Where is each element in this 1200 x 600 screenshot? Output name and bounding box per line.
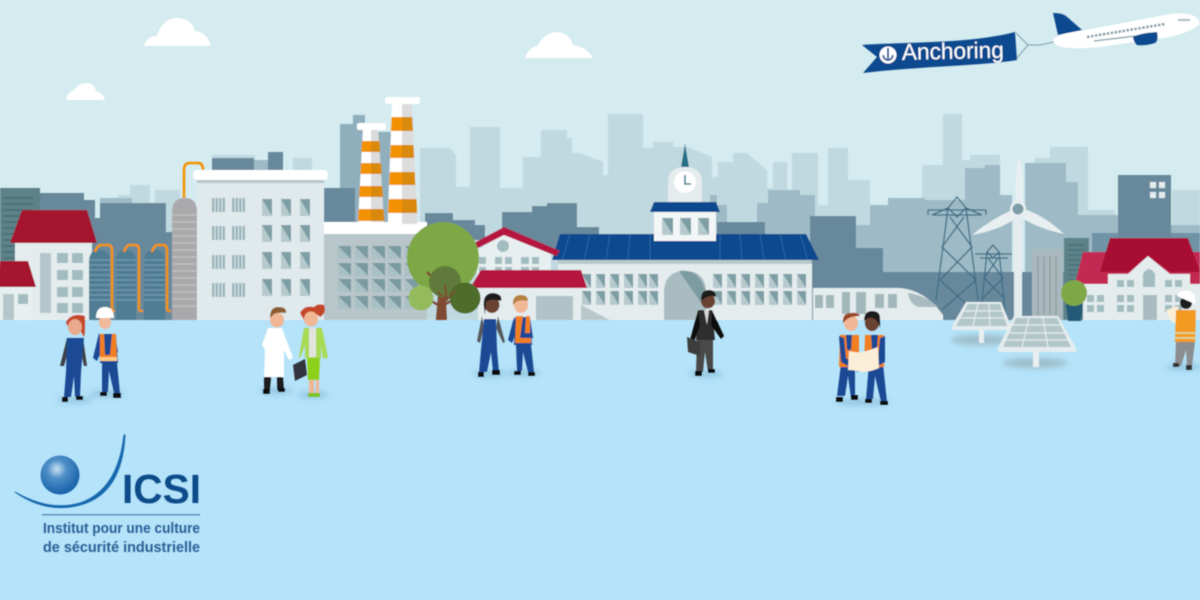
person: worker in orange vest xyxy=(506,295,540,376)
right chimney xyxy=(385,97,420,224)
main white building xyxy=(193,170,328,320)
logo tagline line 1: Institut pour une culture xyxy=(43,520,200,537)
station cupola and clock xyxy=(650,144,720,241)
person: woman in green with briefcase xyxy=(293,304,329,398)
blue roof station xyxy=(552,234,819,320)
grey tower xyxy=(172,163,203,320)
tow line xyxy=(1016,33,1054,58)
near skyline xyxy=(40,152,1200,320)
red roof house xyxy=(470,227,610,320)
shrub xyxy=(1061,280,1087,321)
person: dark skinned woman in overalls xyxy=(473,293,507,377)
person: scientist xyxy=(259,307,293,394)
icon: anchor xyxy=(880,46,896,64)
person: two workers with a plan xyxy=(834,311,890,405)
logo arc xyxy=(15,435,125,508)
ground xyxy=(0,320,1200,600)
people xyxy=(57,290,1200,405)
person: worker seen from behind xyxy=(1166,291,1200,370)
dark tower with windows xyxy=(1064,175,1171,320)
sky background xyxy=(0,0,1200,320)
banner: Anchoring xyxy=(862,32,1017,73)
left slate tower xyxy=(0,188,40,320)
person: businessman with briefcase xyxy=(687,290,724,377)
small left house xyxy=(0,261,36,320)
storage tanks xyxy=(89,250,165,320)
power pylons xyxy=(928,197,1012,320)
person: worker with white helmet xyxy=(89,307,125,398)
banner text: Anchoring xyxy=(902,37,1004,65)
logo wordmark: ICSI xyxy=(122,466,201,512)
factory building xyxy=(324,222,427,320)
airplane xyxy=(1053,13,1200,48)
left chimney xyxy=(357,123,386,222)
wind turbine xyxy=(972,156,1064,320)
train xyxy=(813,288,943,320)
logo globe xyxy=(40,456,80,494)
grey office block xyxy=(1032,249,1063,320)
tank pipes xyxy=(95,245,171,311)
right house xyxy=(1075,238,1200,320)
person: woman with red hair xyxy=(57,315,93,403)
mid skyline xyxy=(100,115,1200,320)
left house xyxy=(10,210,97,320)
tree xyxy=(407,222,480,320)
far skyline xyxy=(118,114,1200,320)
logo tagline line 2: de sécurité industrielle xyxy=(43,539,200,556)
clouds xyxy=(66,18,593,100)
solar panels xyxy=(951,302,1076,368)
logo: ICSI xyxy=(15,435,201,556)
